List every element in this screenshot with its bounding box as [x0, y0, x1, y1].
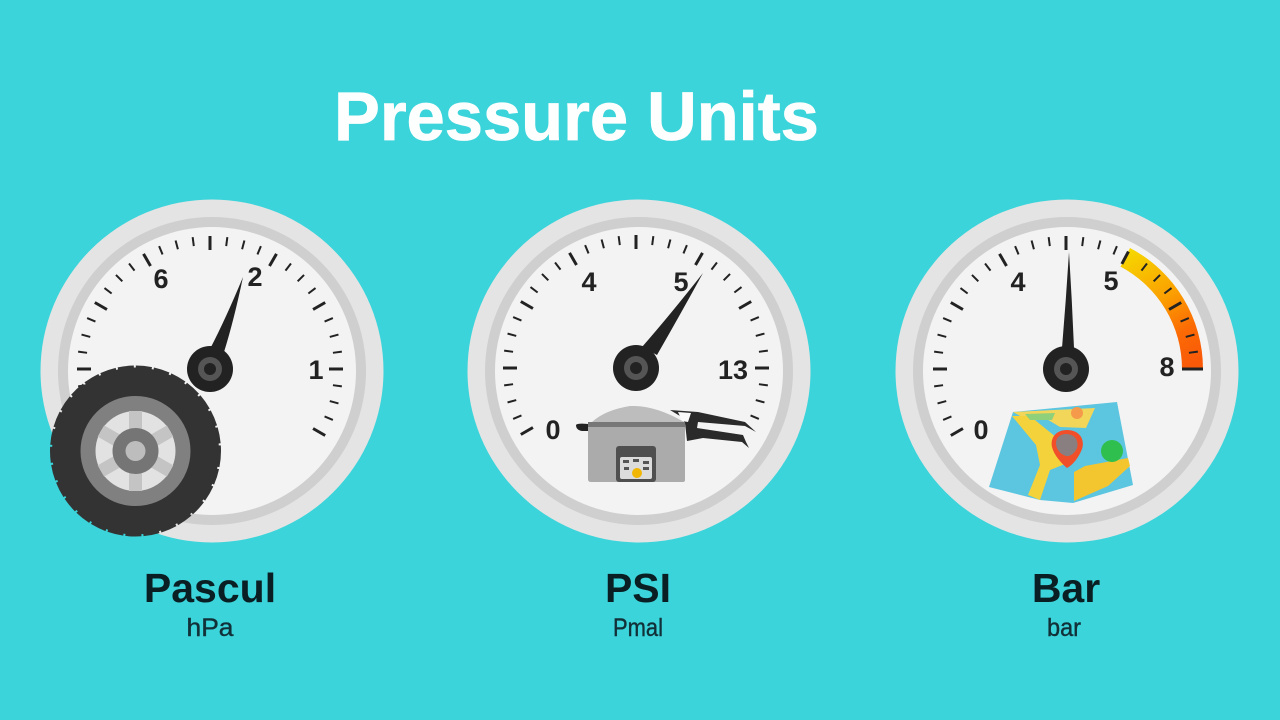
- dial numbers: 8: [1159, 352, 1175, 382]
- label: Pascul: Pascul: [144, 565, 276, 611]
- dial numbers: 4: [1010, 267, 1026, 297]
- gauge: Pascal: [40, 200, 384, 642]
- title: Pressure Units: [334, 78, 819, 155]
- dial numbers: [153, 262, 324, 385]
- dial numbers: [545, 267, 748, 445]
- needle: [1062, 252, 1074, 348]
- dial numbers: 2: [247, 262, 263, 292]
- needle hub: [1043, 346, 1089, 392]
- unit: hPa: hPa: [186, 614, 234, 642]
- dial numbers: 1: [308, 355, 324, 385]
- tick marks: [933, 236, 1203, 436]
- gauge bezel: [40, 200, 384, 542]
- needle hub: [613, 345, 659, 391]
- dial numbers: 0: [545, 415, 561, 445]
- icon: pressure cooker: [576, 406, 756, 482]
- label: Bar: Bar: [1032, 565, 1100, 611]
- dial numbers: 0: [973, 415, 989, 445]
- dial numbers: 6: [153, 264, 169, 294]
- icon: weather map: [989, 402, 1133, 503]
- gauge bezel: [896, 200, 1238, 542]
- needle: [211, 277, 243, 352]
- unit: bar: bar: [1047, 614, 1081, 642]
- tick marks: [503, 235, 769, 434]
- icon: tire: [52, 367, 220, 535]
- tick marks: [77, 236, 343, 436]
- unit: Pmal: Pmal: [613, 614, 663, 642]
- coloured danger arc: [1120, 248, 1203, 369]
- needle: [642, 273, 703, 355]
- label: PSI: PSI: [605, 565, 671, 611]
- gauge: Bar: [896, 200, 1238, 642]
- dial numbers: 5: [673, 267, 689, 297]
- dial numbers: 5: [1103, 266, 1119, 296]
- gauge bezel: [468, 200, 810, 542]
- dial numbers: [973, 266, 1175, 445]
- dial numbers: 13: [718, 355, 748, 385]
- gauge: PSI: [468, 200, 810, 642]
- dial numbers: 4: [581, 267, 597, 297]
- needle hub: [187, 346, 233, 392]
